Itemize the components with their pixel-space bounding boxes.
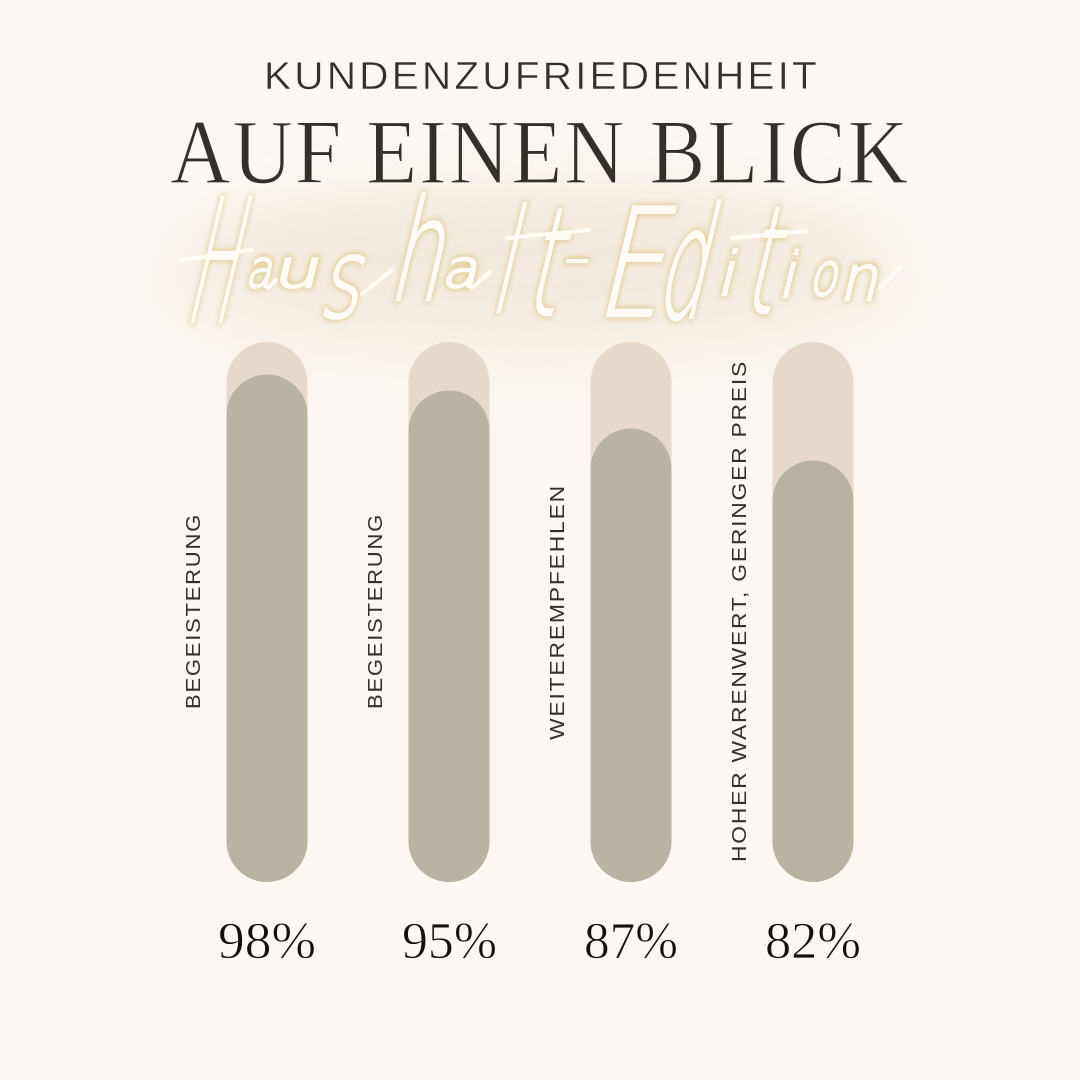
script glow: t <box>515 176 589 350</box>
bar 4: 82% <box>772 342 854 882</box>
script letters: - <box>560 235 596 282</box>
script glow: l <box>481 180 541 347</box>
script letters <box>174 163 910 362</box>
script letters: h <box>379 171 470 334</box>
script letters: a <box>242 240 282 300</box>
label: Weiterempfehlen (bar 3): WEITEREMPFEHLEN <box>546 484 569 740</box>
script letters: E <box>586 177 693 351</box>
script glow: E <box>586 177 693 351</box>
value: 87%: 87% <box>584 913 678 970</box>
script letters: o <box>805 241 849 310</box>
script heading: Haushalt-Edition <box>174 163 910 362</box>
value: 82%: 82% <box>765 913 861 970</box>
script letters: a <box>438 240 488 300</box>
label: Begeisterung (bar 2): BEGEISTERUNG <box>364 513 387 709</box>
script glow: u <box>269 240 329 300</box>
script glow: a <box>438 240 488 300</box>
value: 98%: 98% <box>218 913 316 970</box>
script glow: s <box>311 215 382 344</box>
value: 95%: 95% <box>402 913 497 970</box>
script glow: i <box>774 240 807 312</box>
script glow: o <box>805 241 849 310</box>
script glow: i <box>713 241 746 310</box>
background glow <box>125 200 945 380</box>
script glow: d <box>645 175 736 355</box>
script letters: l <box>481 180 541 347</box>
script letters: H <box>174 163 268 362</box>
script flourishes <box>181 230 900 294</box>
script glow: n <box>835 243 891 315</box>
script letters: i <box>713 241 746 310</box>
label: Hoher Warenwert, geringer Preis (bar 4): HOHER WARENWERT, GERINGER PREIS <box>728 360 751 862</box>
script glow: a <box>242 240 282 300</box>
script letters: u <box>269 240 329 300</box>
title: Auf einen Blick: AUF EINEN BLICK <box>170 101 910 203</box>
script glow <box>174 163 910 362</box>
script letters: t <box>515 176 589 350</box>
script glow: H <box>174 163 268 362</box>
subtitle: Kundenzufriedenheit: KUNDENZUFRIEDENHEIT <box>264 55 820 98</box>
bar chart <box>226 342 854 882</box>
script letters: t <box>733 174 805 348</box>
bar 2: 95% <box>408 342 490 882</box>
script letters: n <box>835 243 891 315</box>
script letters: i <box>774 240 807 312</box>
bar 3: 87% <box>590 342 672 882</box>
script glow: - <box>560 235 596 282</box>
bar 1: 98% <box>226 342 308 882</box>
script letters: s <box>311 215 382 344</box>
script letters: d <box>645 175 736 355</box>
script glow: h <box>379 171 470 334</box>
script glow: t <box>733 174 805 348</box>
label: Begeisterung (bar 1): BEGEISTERUNG <box>182 513 205 709</box>
